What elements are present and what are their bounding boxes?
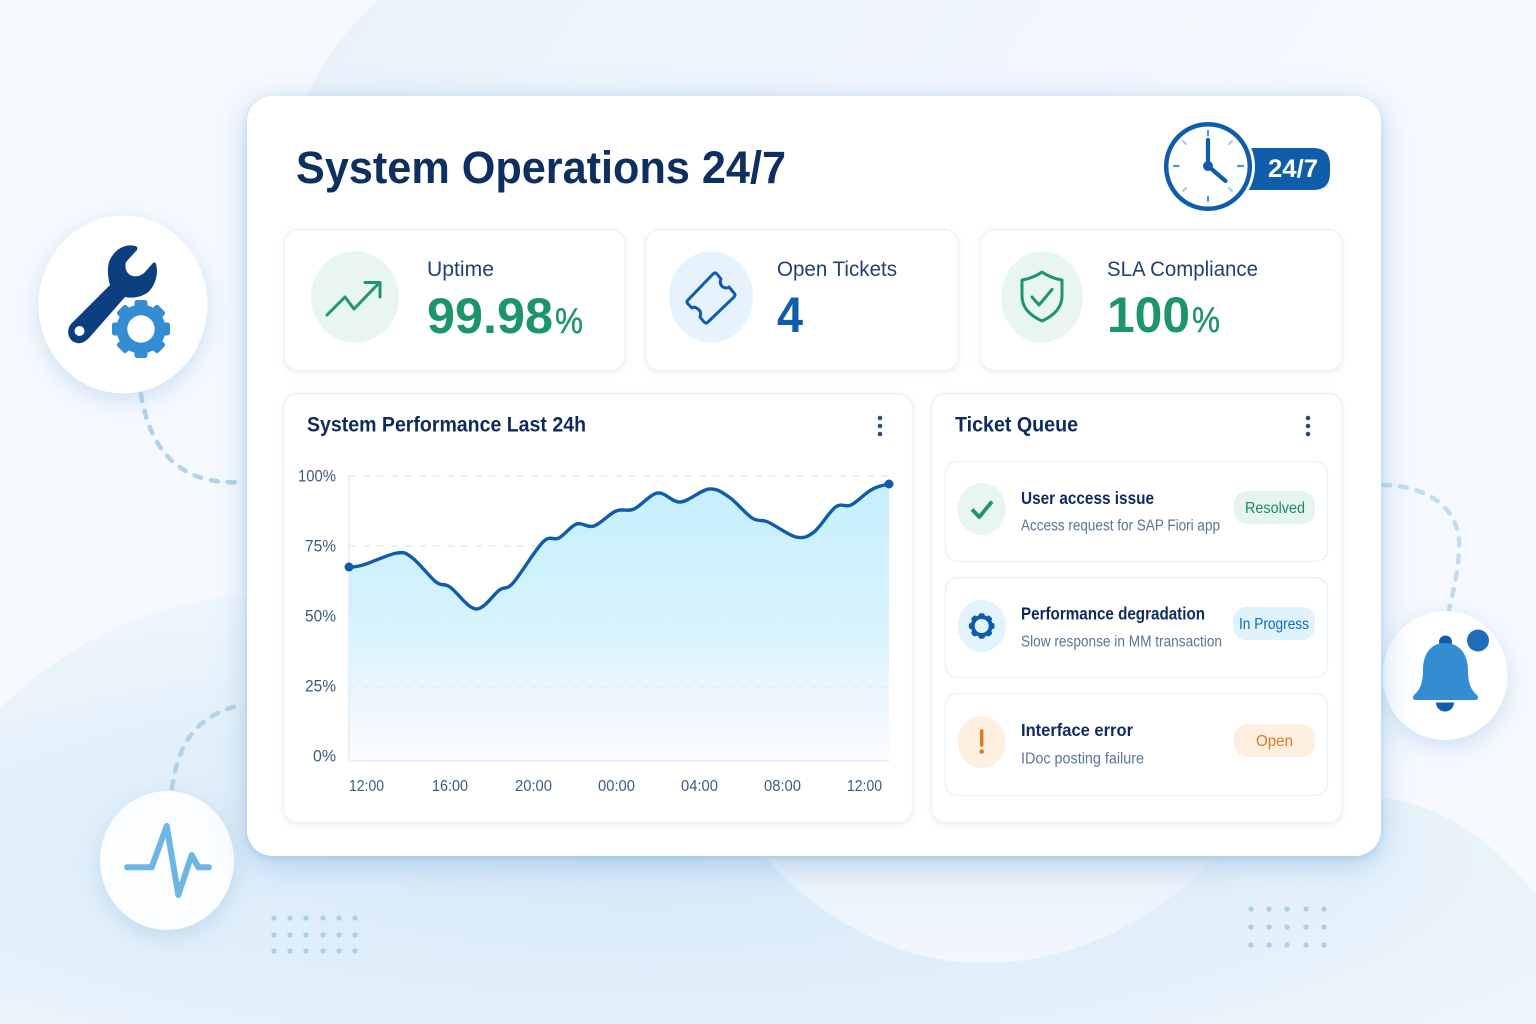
stat card: sla compliance: [980, 230, 1342, 370]
y axis labels: 25%: [305, 676, 336, 696]
x axis labels: 00:00: [598, 778, 635, 795]
heading: system performance: System Performance Last 24h: [307, 414, 586, 436]
y axis labels: [298, 466, 336, 766]
icon: bell badge: [1382, 611, 1508, 740]
ticket text: Slow response in MM transaction: [1021, 634, 1222, 650]
y axis labels: 75%: [305, 536, 336, 556]
ticket text: Interface error: [1021, 720, 1133, 740]
ticket text: Performance degradation: [1021, 604, 1205, 624]
x axis labels: 12:00: [349, 778, 384, 795]
status pill: resolved: [1234, 491, 1315, 524]
heading: ticket queue: Ticket Queue: [955, 414, 1078, 436]
icon: exclamation: [958, 716, 1006, 768]
value: uptime: 99.98: [427, 288, 553, 344]
x axis labels: 20:00: [515, 778, 552, 795]
status pill: in progress: [1233, 607, 1315, 640]
x axis labels: 08:00: [764, 778, 801, 795]
icon: small gear: [958, 600, 1006, 652]
main dashboard card: [247, 96, 1381, 856]
panel: system performance: [284, 394, 912, 822]
value: uptime: %: [555, 302, 583, 341]
stat card: open tickets: [646, 230, 958, 370]
label: uptime: Uptime: [427, 258, 494, 281]
ticket text: User access issue: [1021, 488, 1154, 508]
ticket: performance degradation: [946, 578, 1328, 678]
x axis labels: [349, 778, 882, 795]
ticket: user access issue: [946, 462, 1328, 562]
icon: ticket: [669, 251, 753, 343]
connector: bell to card: [1383, 485, 1459, 610]
axes: [349, 476, 889, 761]
data line: [349, 484, 889, 609]
ticket text: [1021, 488, 1220, 534]
status pill: in progress: In Progress: [1239, 616, 1309, 633]
y axis labels: 100%: [298, 466, 336, 486]
connector: pulse to card: [172, 705, 242, 788]
ticket text: [1021, 720, 1144, 768]
icon: wrench and gear badge: [38, 216, 208, 394]
ticket: interface error: [946, 694, 1328, 796]
y axis labels: 50%: [305, 606, 336, 626]
x axis labels: 04:00: [681, 778, 718, 795]
label: open tickets: Open Tickets: [777, 258, 897, 281]
icon: trend arrow: [311, 251, 399, 343]
value: sla compliance: 100: [1107, 287, 1190, 343]
icon: menu dots: [1306, 416, 1310, 436]
icon: shield check: [1001, 251, 1083, 343]
icon: pulse badge: [100, 791, 234, 930]
status pill: resolved: Resolved: [1245, 500, 1305, 517]
connector: wrench to card: [141, 394, 242, 482]
ticket text: Access request for SAP Fiori app: [1021, 518, 1220, 534]
icon: 24/7 clock with badge: [1161, 120, 1330, 214]
status pill: open: Open: [1256, 733, 1293, 750]
stat card: uptime: [284, 230, 625, 370]
x axis labels: 12:00: [847, 778, 882, 795]
panel: ticket queue: [932, 394, 1342, 822]
dot grid left: [271, 915, 358, 954]
icon: 24/7 clock with badge: 24/7: [1268, 155, 1318, 183]
label: sla compliance: SLA Compliance: [1107, 258, 1258, 281]
title: System Operations 24/7: [296, 142, 786, 193]
ticket text: [1021, 604, 1222, 650]
x axis labels: 16:00: [432, 778, 468, 795]
value: open tickets: 4: [777, 287, 803, 343]
y axis labels: 0%: [313, 746, 336, 766]
icon: menu dots: [878, 416, 882, 436]
icon: check: [958, 483, 1006, 535]
status pill: open: [1234, 724, 1315, 757]
line chart: [298, 466, 894, 795]
value: sla compliance: %: [1192, 301, 1220, 340]
data end points: [344, 480, 894, 572]
grid lines: [349, 476, 889, 687]
ticket text: IDoc posting failure: [1021, 750, 1144, 768]
dot grid right: [1248, 906, 1327, 948]
